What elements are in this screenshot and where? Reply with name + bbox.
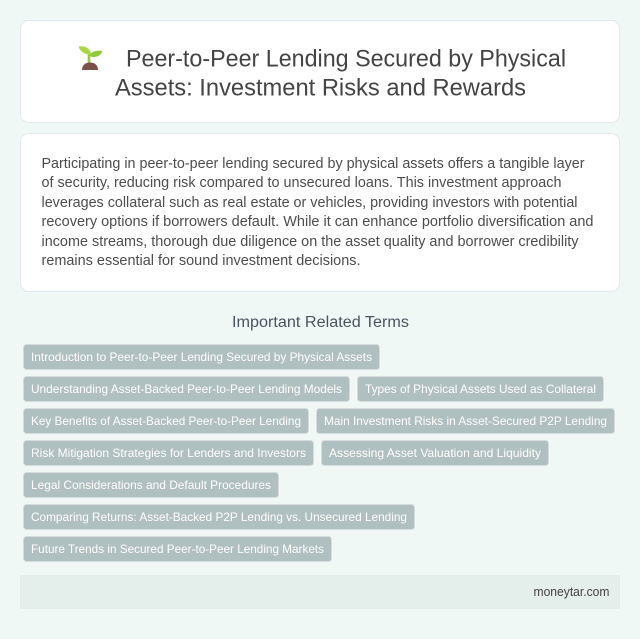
title heading: Peer-to-Peer Lending Secured by Physical xyxy=(126,46,566,72)
panel: description card xyxy=(20,134,620,292)
related terms list xyxy=(24,344,614,562)
term pill: Key Benefits of Asset-Backed Peer-to-Peer Lending xyxy=(31,414,301,428)
term pill xyxy=(24,504,414,530)
description text: remains essential for sound investment decisions. xyxy=(42,253,360,269)
description text: recovery options if borrowers default. While it can enhance portfolio diversification and xyxy=(42,214,594,230)
term pill: Main Investment Risks in Asset-Secured P2P Lending xyxy=(324,414,607,428)
title heading: Assets: Investment Risks and Rewards xyxy=(115,74,526,102)
footer bar xyxy=(20,575,620,609)
description text xyxy=(42,156,594,269)
term pill: Types of Physical Assets Used as Collateral xyxy=(365,382,596,396)
term pill xyxy=(24,440,314,466)
term pill: Assessing Asset Valuation and Liquidity xyxy=(329,446,541,460)
section heading: Important Related Terms xyxy=(232,314,409,331)
term pill: Introduction to Peer-to-Peer Lending Secured by Physical Assets xyxy=(31,350,372,364)
term pill: Future Trends in Secured Peer-to-Peer Lending Markets xyxy=(31,542,324,556)
description text: income streams, thorough due diligence on the asset quality and borrower credibility xyxy=(42,234,579,250)
description text: Participating in peer-to-peer lending secured by physical assets offers a tangible layer xyxy=(42,156,585,172)
title heading xyxy=(115,46,566,102)
term pill xyxy=(24,536,332,562)
footer source text: moneytar.com xyxy=(534,585,610,599)
description text: of security, reducing risk compared to unsecured loans. This investment approach xyxy=(42,175,562,191)
icon: seedling xyxy=(78,46,102,70)
term pill xyxy=(358,376,604,402)
term pill xyxy=(24,472,278,498)
term pill xyxy=(316,408,614,434)
term pill xyxy=(24,344,380,370)
term pill: Understanding Asset-Backed Peer-to-Peer Lending Models xyxy=(31,382,342,396)
term pill: Risk Mitigation Strategies for Lenders and Investors xyxy=(31,446,306,460)
term pill xyxy=(24,376,350,402)
term pill: Legal Considerations and Default Procedures xyxy=(31,478,271,492)
term pill xyxy=(322,440,548,466)
term pill xyxy=(24,408,308,434)
term pill: Comparing Returns: Asset-Backed P2P Lending vs. Unsecured Lending xyxy=(31,510,407,524)
description text: leverages collateral such as real estate or vehicles, providing investors with potential xyxy=(42,195,578,211)
panel: title card xyxy=(20,20,620,122)
